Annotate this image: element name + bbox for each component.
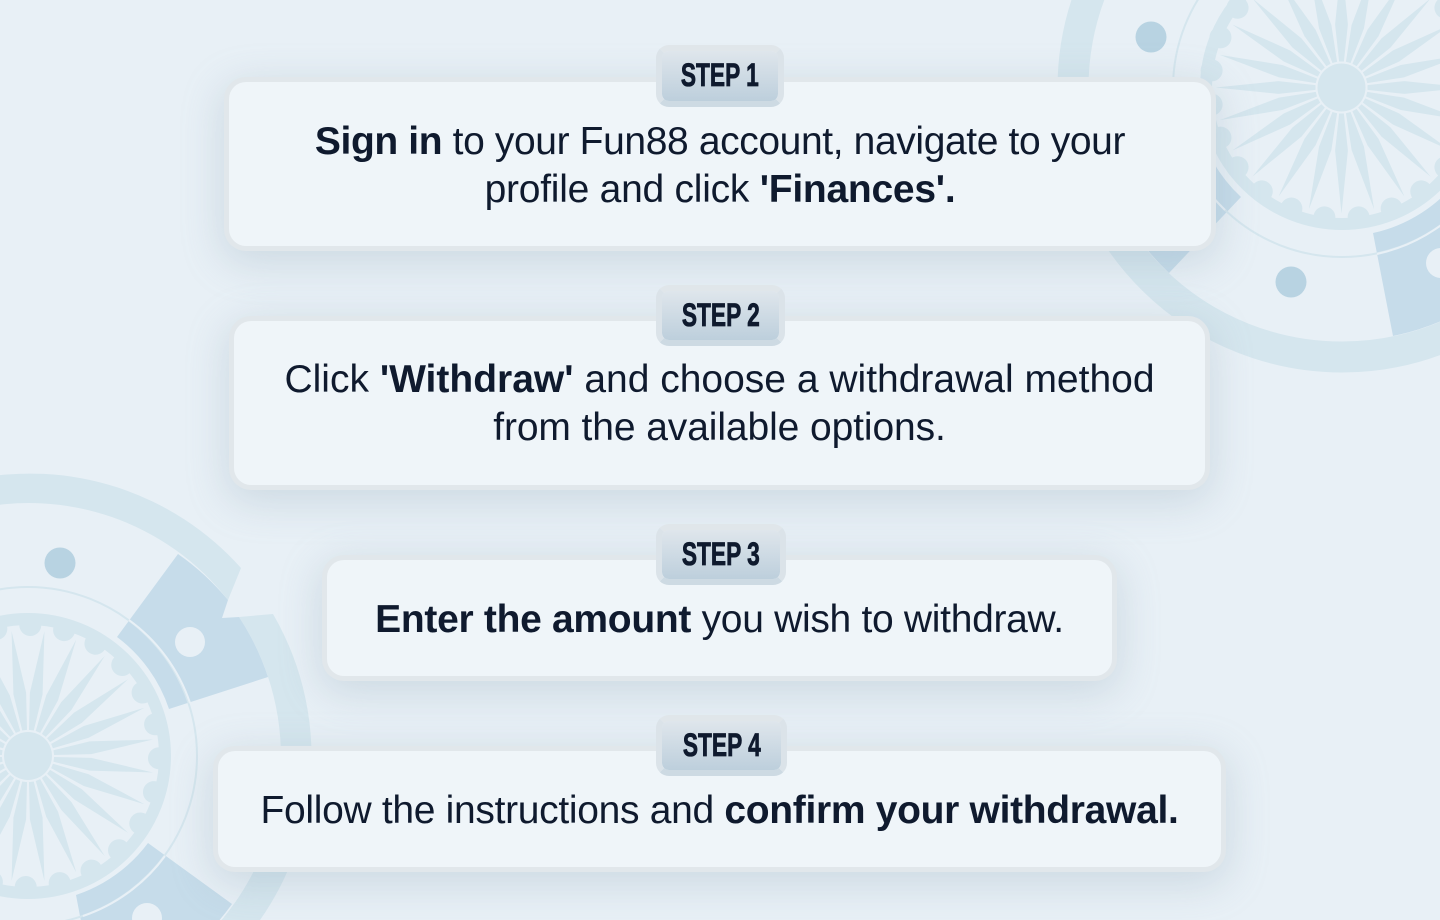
text: step 1 line 1: Sign in to your Fun88 account, navigate to your <box>315 120 1125 163</box>
text: step 4: Follow the instructions and confirm your withdrawal. <box>260 789 1178 832</box>
badge: step 1 <box>656 45 784 107</box>
text: step 1 line 2: profile and click 'Finances'. <box>485 168 955 211</box>
badge: step 3: STEP 3 <box>682 536 760 572</box>
text: step 3: Enter the amount you wish to withdraw. <box>375 598 1064 641</box>
panel: step 2 card <box>234 321 1205 485</box>
badge: step 1: STEP 1 <box>681 57 759 93</box>
panel: step 4 card <box>218 751 1221 867</box>
badge: step 4: STEP 4 <box>683 727 760 763</box>
panel: step 3 card <box>327 560 1112 676</box>
text: step 2 line 1: Click 'Withdraw' and choose a withdrawal method <box>284 358 1155 401</box>
wheel: top right <box>1073 0 1440 357</box>
badge: step 4 <box>656 715 787 776</box>
wheel: bottom left <box>0 474 312 920</box>
badge: step 2 <box>656 285 785 346</box>
text: step 2 line 2: from the available options. <box>493 406 946 449</box>
badge: step 3 <box>656 524 786 585</box>
badge: step 2: STEP 2 <box>682 297 759 333</box>
panel: step 1 card <box>229 82 1211 246</box>
